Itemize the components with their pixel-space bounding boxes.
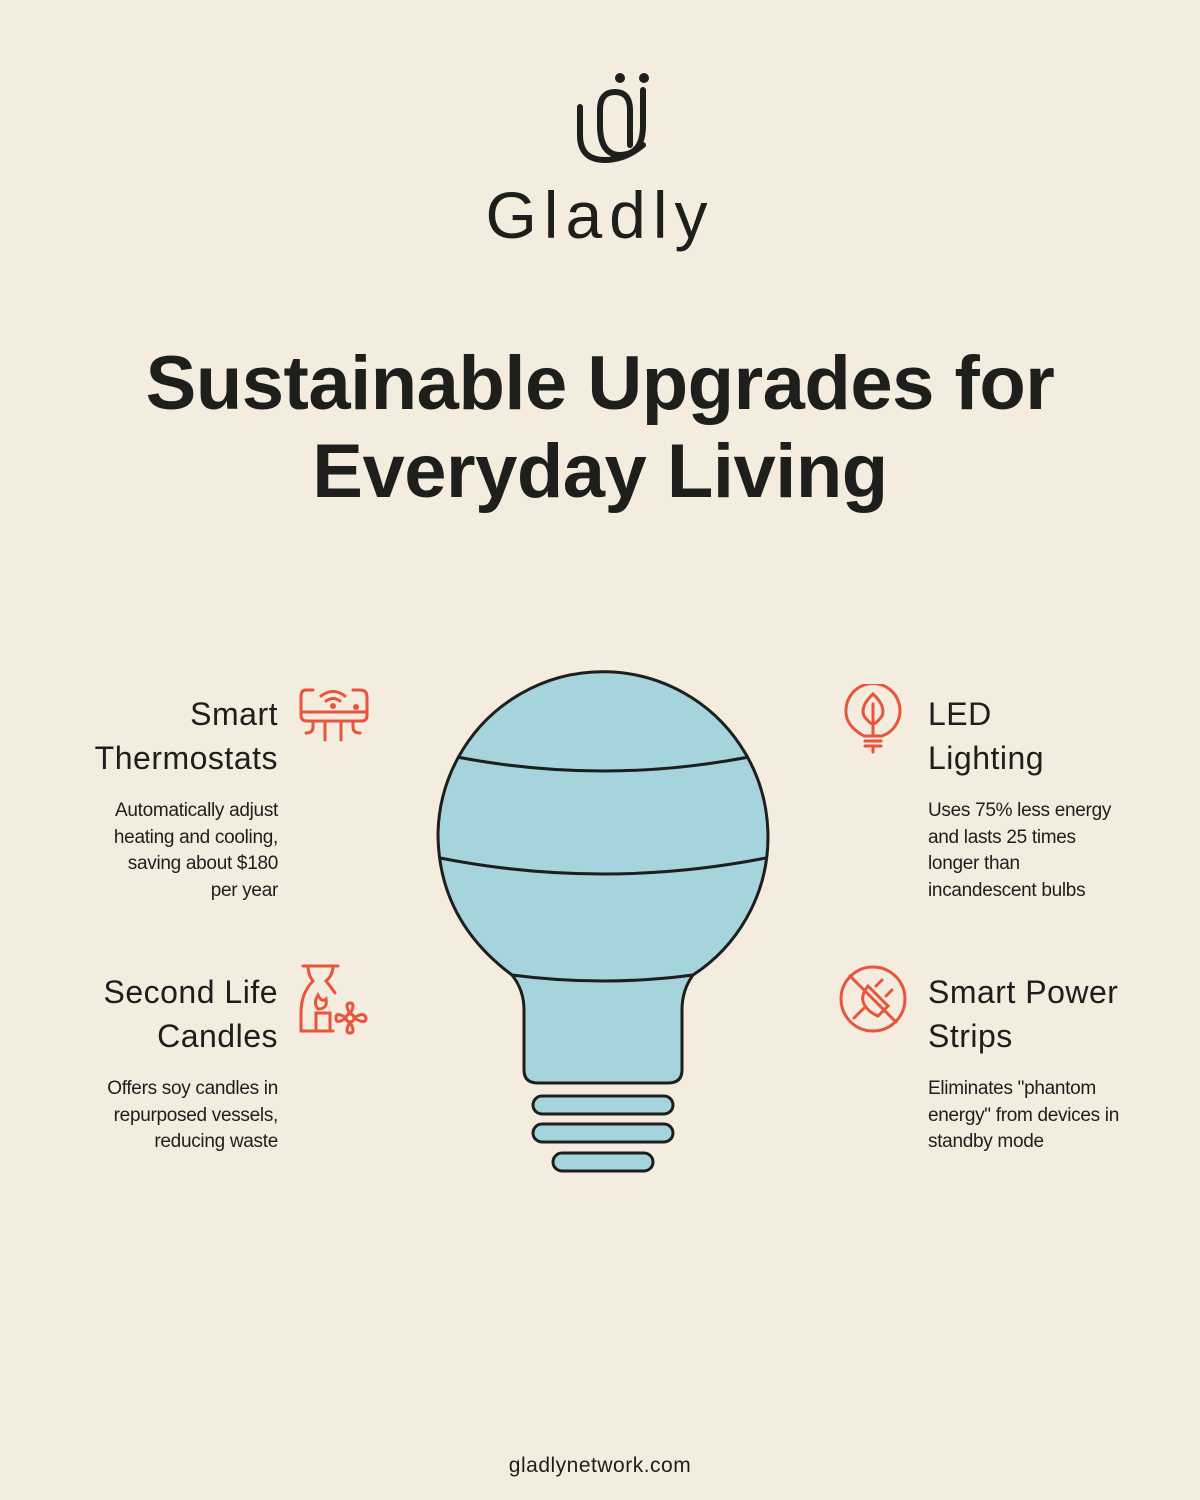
description: Offers soy candles in repurposed vessels, reducing waste	[107, 1078, 278, 1152]
heading: Smart	[190, 696, 278, 732]
heading: Second Life	[103, 974, 278, 1010]
panel: smart power strips	[928, 974, 1119, 1152]
title: Sustainable Upgrades for	[146, 341, 1054, 426]
icon: thermostat	[300, 688, 368, 742]
lightbulb illustration	[436, 670, 770, 1172]
description: Automatically adjust heating and cooling, saving about $180	[114, 800, 278, 874]
heading	[103, 974, 278, 1054]
heading: Lighting	[928, 740, 1044, 776]
heading: Strips	[928, 1018, 1013, 1054]
icon: led bulb	[844, 684, 902, 754]
heading: LED	[928, 696, 992, 732]
heading	[928, 974, 1118, 1054]
icon: no plug	[840, 966, 906, 1032]
description: Uses 75% less energy and lasts 25 times longer than incandescent bulbs	[928, 800, 1111, 900]
title: Everyday Living	[312, 429, 888, 514]
footer url: gladlynetwork.com	[509, 1454, 691, 1477]
panel: smart thermostats	[95, 696, 278, 900]
description: Eliminates "phantom energy" from devices in standby mode	[928, 1078, 1119, 1152]
heading: Candles	[157, 1018, 278, 1054]
panel: led lighting	[928, 696, 1112, 900]
icon: candle	[300, 964, 368, 1034]
heading: Smart Power	[928, 974, 1118, 1010]
panel: second life candles	[103, 974, 278, 1152]
brand name: Gladly	[485, 178, 715, 252]
heading	[95, 696, 278, 776]
heading: Thermostats	[95, 740, 278, 776]
logo mark	[577, 73, 649, 163]
heading	[928, 696, 1044, 776]
title	[146, 341, 1054, 514]
description: per year	[211, 880, 278, 900]
